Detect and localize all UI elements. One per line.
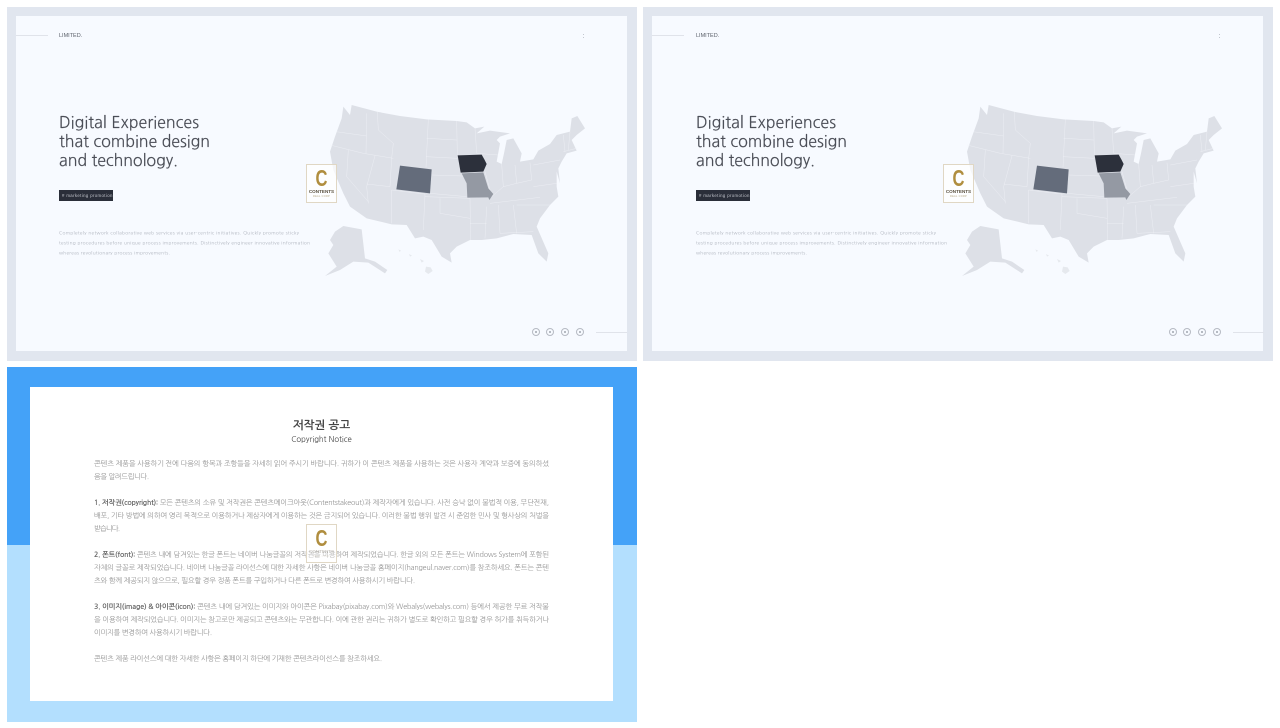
main heading <box>59 114 210 169</box>
description text: whereas revolutionary process improvements. <box>59 250 170 256</box>
logo name: CONTENTS <box>309 189 334 194</box>
header rule <box>652 35 684 36</box>
slide 2 inner panel <box>652 16 1263 351</box>
intro paragraph <box>94 460 549 481</box>
notice body text <box>94 460 549 663</box>
description text: Completely network collaborative web services via user-centric initiatives. Quickly promote sticky <box>59 230 300 236</box>
icon 1 <box>532 328 540 336</box>
Alaska <box>325 226 387 276</box>
description text: testing procedures before unique process improvements. Distinctively engineer innovative information <box>696 240 947 246</box>
notice title: 저작권 공고 <box>293 419 350 431</box>
logo badge <box>306 524 337 563</box>
section 3: images and icons: 3. 이미지(image) & 아이콘(icon): 콘텐츠 내에 담겨있는 이미지와 아이콘은 Pixabay(pixabay.com)와 Webalys(webalys.com) 등에서 제공한 무료 저작물 <box>94 602 549 611</box>
section 1: copyright: 1. 저작권(copyright): 모든 콘텐츠의 소유 및 저작권은 콘텐츠메이크아웃(Contentstakeout)과 제작자에게 있습니다. 사전 승낙 없이 불법적 이용, 무단전재, <box>94 498 549 507</box>
logo letter: C <box>953 165 964 191</box>
Wyoming <box>396 166 432 193</box>
section 1: copyright: 받습니다. <box>94 525 120 533</box>
intro paragraph: 콘텐츠 제품을 사용하기 전에 다음의 항목과 조항들을 자세히 읽어 주시기 바랍니다. 귀하가 이 콘텐츠 제품을 사용하는 것은 사용자 계약과 보증에 동의하셨 <box>94 460 549 468</box>
closing line: 콘텐츠 제품 라이선스에 대한 자세한 사항은 홈페이지 하단에 기재한 콘텐츠라이선스를 참조하세요. <box>94 655 382 663</box>
tag label: # marketing promotion <box>62 193 113 198</box>
Alaska <box>962 226 1024 276</box>
Wyoming <box>1033 166 1068 193</box>
menu icon <box>583 34 584 38</box>
Hawaii <box>398 249 433 274</box>
slide 1 <box>7 7 637 361</box>
section 1: copyright <box>94 498 549 533</box>
notice subtitle: Copyright Notice <box>291 436 352 444</box>
header rule <box>16 35 48 36</box>
description text <box>59 230 310 256</box>
section 2: font: 츠와 함께 제공되지 않으므로, 필요할 경우 정품 폰트를 구입하거나 다른 폰트로 변경하여 사용하시기 바랍니다. <box>94 576 415 585</box>
icon 3 <box>561 328 569 336</box>
section 3: images and icons <box>94 602 549 637</box>
description text: Completely network collaborative web services via user-centric initiatives. Quickly promote sticky <box>696 230 937 236</box>
section 2: font <box>94 551 549 585</box>
icon 1 <box>1169 328 1177 336</box>
icon 4 <box>576 328 584 336</box>
logo letter: C <box>316 165 327 191</box>
main heading: that combine design <box>59 134 210 150</box>
brand label: LIMITED. <box>59 33 82 39</box>
Iowa <box>1094 155 1123 173</box>
social icons <box>532 328 584 336</box>
icon 3 <box>1198 328 1206 336</box>
logo name: CONTENTS <box>309 549 334 554</box>
main heading: Digital Experiences <box>59 115 199 131</box>
light blue lower band <box>7 545 637 722</box>
slide 1 inner panel <box>16 16 627 351</box>
logo badge <box>306 164 337 203</box>
section 2: font: 2. 폰트(font): 콘텐츠 내에 담겨있는 한글 폰트는 네이버 나눔글꼴의 저작권을 이용하여 제작되었습니다. 한글 외의 모든 폰트는 Windows System에 포함된 <box>94 551 549 559</box>
icon 4 <box>1213 328 1221 336</box>
intro paragraph: 음을 알려드립니다. <box>94 473 149 481</box>
tag label <box>59 190 113 201</box>
US map <box>962 105 1222 276</box>
logo name: CONTENTS <box>946 189 971 194</box>
main heading: that combine design <box>696 134 847 150</box>
US map <box>326 105 585 276</box>
slide 2 <box>643 7 1273 361</box>
footer rule <box>596 332 627 333</box>
section 3: images and icons: 이미지를 변경하여 사용하시기 바랍니다. <box>94 629 212 637</box>
section 1: copyright: 배포, 기타 방법에 의하여 영리 목적으로 이용하거나 제삼자에게 이용하는 것은 금지되어 있습니다. 이러한 불법 행위 발견 시 준엄한 민사 및 형사상의 처벌을 <box>94 511 549 520</box>
Missouri <box>1098 172 1130 200</box>
tag label: # marketing promotion <box>699 193 750 198</box>
description text: testing procedures before unique process improvements. Distinctively engineer innovative information <box>59 240 310 246</box>
mainland <box>966 105 1222 263</box>
mainland <box>330 105 585 263</box>
Hawaii <box>1035 249 1069 274</box>
icon 2 <box>1183 328 1191 336</box>
Missouri <box>462 172 493 200</box>
tag label <box>696 190 750 201</box>
section 3: images and icons: 을 이용하여 제작되었습니다. 이미지는 참고로만 제공되고 콘텐츠와는 무관합니다. 이에 관한 권리는 귀하가 별도로 확인하고 필요할 경우 허가를 취득하거나 <box>94 616 549 624</box>
state borders <box>330 112 577 240</box>
state borders <box>966 112 1213 240</box>
Iowa <box>458 155 487 173</box>
logo subtitle: REAL CORP <box>313 195 330 198</box>
logo subtitle: REAL CORP <box>950 195 967 198</box>
description text: whereas revolutionary process improvements. <box>696 250 807 256</box>
slide 3: copyright notice <box>7 367 637 722</box>
main heading <box>696 114 847 169</box>
logo badge <box>943 164 974 203</box>
description text <box>696 230 947 256</box>
logo letter: C <box>316 525 327 551</box>
main heading: and technology. <box>696 153 815 169</box>
icon 2 <box>546 328 554 336</box>
logo subtitle: REAL CORP <box>313 555 330 558</box>
main heading: and technology. <box>59 153 178 169</box>
section 2: font: 자체의 글꼴로 제작되었습니다. 네이버 나눔글꼴 라이선스에 대한 자세한 사항은 네이버 나눔글꼴 홈페이지(hangeul.naver.com)를 참조하세요. 폰트는 콘텐 <box>94 564 549 572</box>
white notice panel <box>30 387 613 701</box>
social icons <box>1169 328 1221 336</box>
footer rule <box>1233 332 1264 333</box>
main heading: Digital Experiences <box>696 115 836 131</box>
menu icon <box>1219 34 1220 38</box>
brand label: LIMITED. <box>696 33 719 39</box>
